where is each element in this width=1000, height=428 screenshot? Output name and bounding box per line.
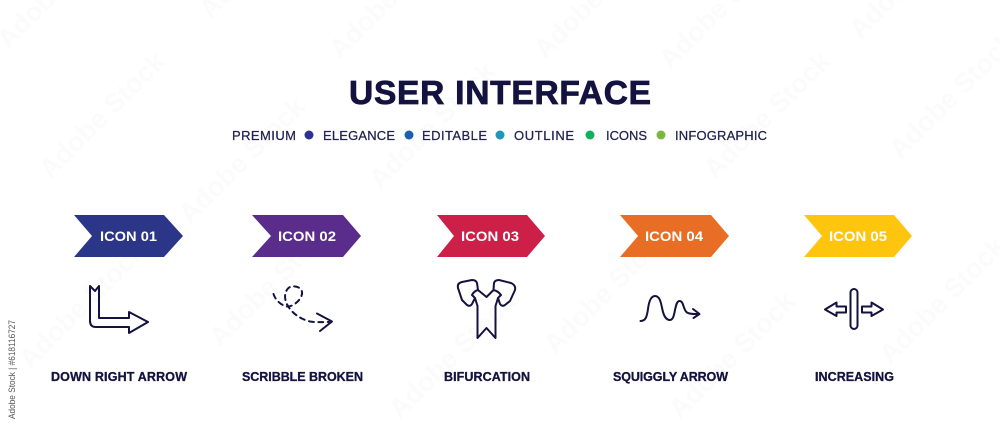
watermark pattern: Adobe Stock <box>173 91 312 229</box>
banner: icon 01 <box>74 215 183 257</box>
banner: icon 04 <box>620 215 729 257</box>
banner: icon 01: ICON 01 <box>100 228 157 244</box>
subtitle keyword row: OUTLINE <box>514 128 574 143</box>
watermark pattern: Adobe Stock <box>363 56 502 194</box>
subtitle keyword row: ELEGANCE <box>323 128 395 143</box>
icon: scribble broken arrow <box>274 286 332 331</box>
watermark pattern: Adobe Stock <box>383 286 522 424</box>
label: squiggly arrow: SQUIGGLY ARROW <box>613 370 728 384</box>
subtitle keyword row: ICONS <box>606 128 647 143</box>
subtitle keyword row: INFOGRAPHIC <box>675 128 767 143</box>
title: USER INTERFACE <box>349 75 651 112</box>
panel: icon 01 down right arrow <box>51 215 187 384</box>
watermark pattern: Adobe Stock <box>698 46 837 184</box>
panel: icon 03 bifurcation <box>437 215 545 384</box>
label: scribble broken: SCRIBBLE BROKEN <box>242 370 363 384</box>
stock id vertical text: Adobe Stock | #618116727 <box>7 320 18 419</box>
label: down right arrow: DOWN RIGHT ARROW <box>51 370 187 384</box>
banner: icon 04: ICON 04 <box>645 228 703 244</box>
banner: icon 05 <box>804 215 912 257</box>
icon: increasing <box>825 289 883 329</box>
banner: icon 03: ICON 03 <box>461 228 519 244</box>
icon: bifurcation <box>458 280 515 338</box>
banner: icon 03 <box>437 215 545 257</box>
subtitle keyword row: EDITABLE <box>422 128 487 143</box>
watermark pattern: Adobe Stock <box>538 221 677 359</box>
banner: icon 02: ICON 02 <box>278 228 336 244</box>
watermark pattern: Adobe Stock <box>33 46 172 184</box>
subtitle keyword row: PREMIUM <box>232 128 296 143</box>
icon: down right arrow <box>90 286 148 333</box>
watermark pattern: Adobe Stock <box>13 236 152 374</box>
panel: icon 05 increasing <box>804 215 912 384</box>
subtitle keyword row <box>232 128 767 143</box>
banner: icon 05: ICON 05 <box>829 228 887 244</box>
watermark pattern: Adobe Stock <box>663 286 802 424</box>
label: bifurcation: BIFURCATION <box>444 370 530 384</box>
icon: squiggly arrow <box>640 296 700 321</box>
panel: icon 02 scribble broken <box>242 215 363 384</box>
watermark pattern: Adobe Stock <box>203 214 342 352</box>
banner: icon 02 <box>252 215 361 257</box>
panel: icon 04 squiggly arrow <box>613 215 729 384</box>
label: increasing: INCREASING <box>815 370 894 384</box>
